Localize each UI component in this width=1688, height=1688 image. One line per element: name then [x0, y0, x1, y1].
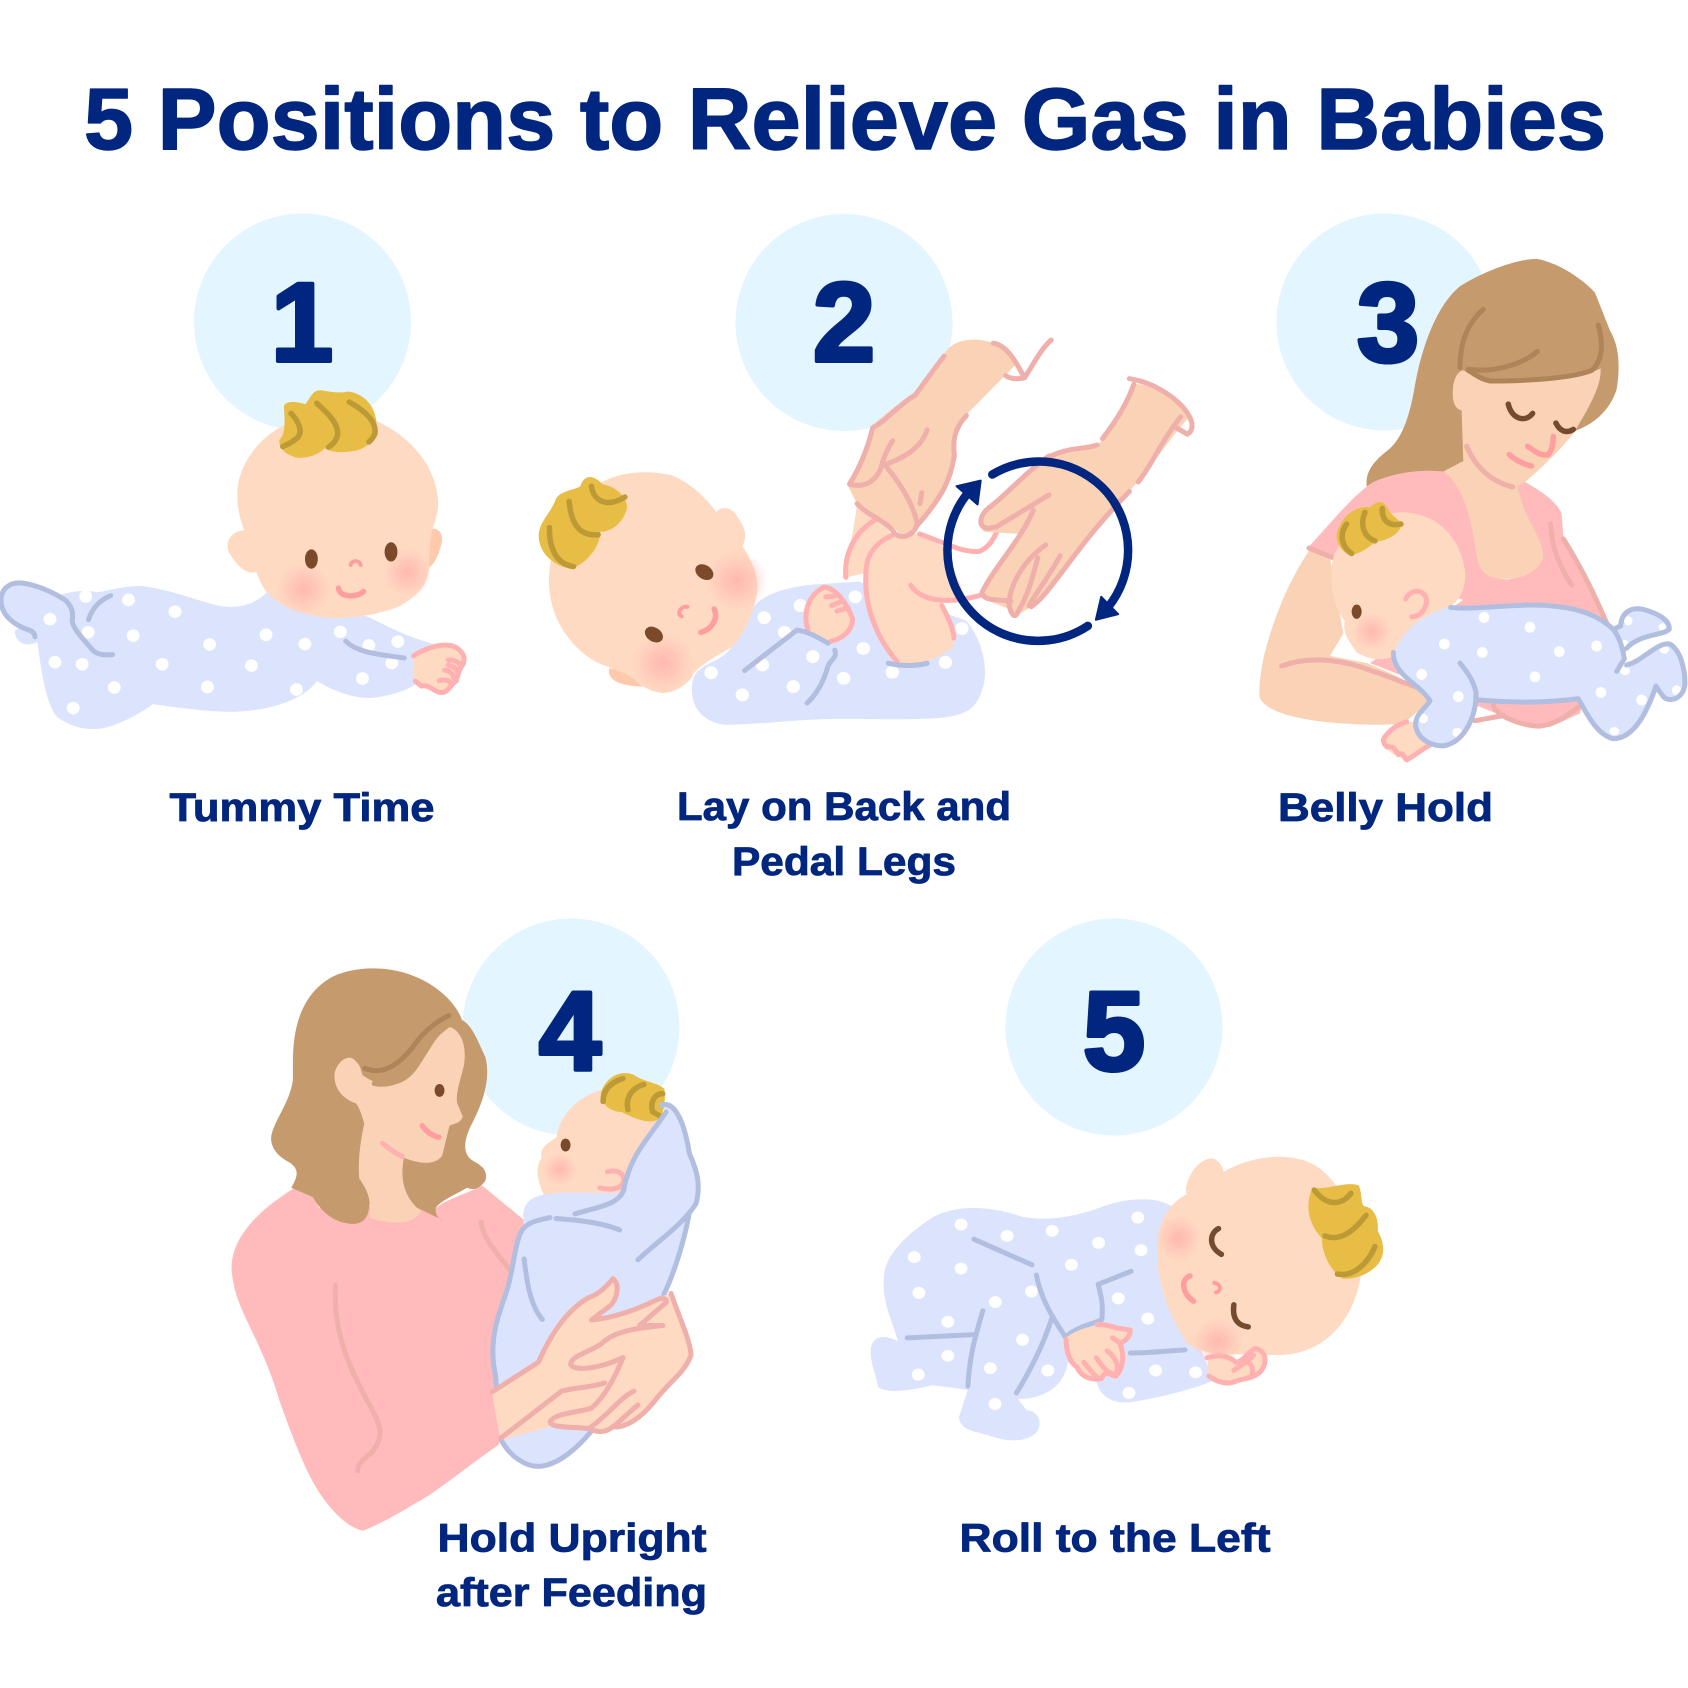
number badge 4: 4 [539, 969, 601, 1094]
number badge 3 [1276, 214, 1494, 430]
label: hold upright: Hold Upright [438, 1516, 706, 1560]
label: belly hold: Belly Hold [1278, 786, 1493, 830]
number badge 1 [194, 214, 411, 430]
number badge 4 [462, 918, 680, 1136]
number badge 5: 5 [1083, 969, 1145, 1094]
label: hold upright [436, 1516, 707, 1615]
label: pedal legs: Pedal Legs [732, 840, 956, 884]
illustration: baby on tummy [1, 390, 464, 729]
illustration: mother holding baby on forearm [1259, 259, 1685, 760]
label: roll to the left: Roll to the Left [960, 1516, 1270, 1560]
number badge 2 [736, 214, 952, 431]
panel: belly hold [1259, 214, 1685, 830]
label: tummy time: Tummy Time [170, 786, 434, 830]
panel: tummy time [1, 214, 464, 830]
label: pedal legs: Lay on Back and [677, 785, 1011, 829]
panel: pedal legs [539, 214, 1192, 884]
label: pedal legs [677, 785, 1011, 884]
number badge 2: 2 [813, 260, 875, 385]
number badge 1: 1 [271, 260, 333, 385]
number badge 5 [1006, 918, 1222, 1136]
panel: hold upright [232, 918, 707, 1615]
illustration: baby on back with hands pedalling legs [539, 340, 1192, 725]
icon: circular arrows [947, 461, 1128, 641]
number badge 3: 3 [1357, 260, 1419, 385]
label: hold upright: after Feeding [436, 1571, 707, 1615]
illustration: mother holding swaddled baby upright [232, 968, 698, 1531]
panel: roll to the left [871, 918, 1383, 1560]
title: 5 Positions to Relieve Gas in Babies [84, 71, 1606, 168]
illustration: baby lying on left side [871, 1157, 1383, 1440]
